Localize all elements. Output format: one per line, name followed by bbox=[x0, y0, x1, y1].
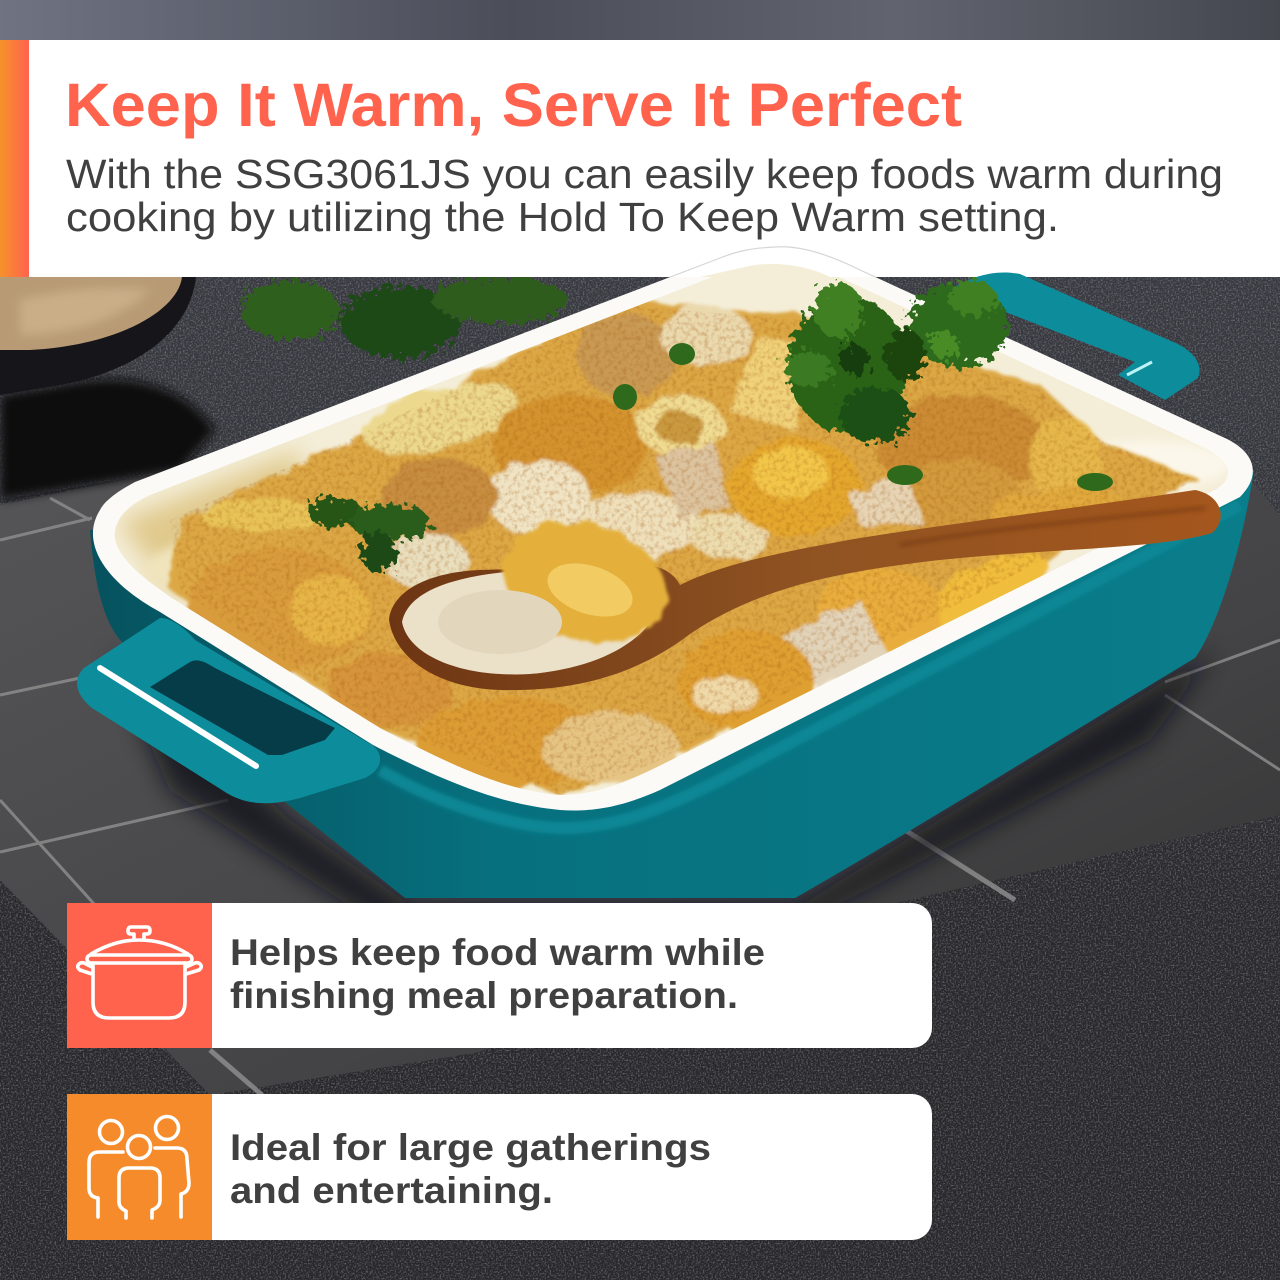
towel bbox=[0, 470, 1280, 1095]
intro text bbox=[66, 151, 1223, 240]
intro text: With the SSG3061JS you can easily keep foods warm during bbox=[66, 151, 1223, 197]
dish shadow bbox=[110, 650, 1215, 925]
parsley in background bbox=[240, 276, 568, 358]
card text: finishing meal preparation. bbox=[230, 975, 738, 1016]
card text bbox=[230, 932, 765, 1016]
card text: Helps keep food warm while bbox=[230, 932, 765, 973]
food bbox=[166, 299, 1202, 795]
title: Keep It Warm, Serve It Perfect bbox=[65, 71, 962, 139]
card text: Ideal for large gatherings bbox=[230, 1127, 711, 1168]
icon tile bbox=[67, 1094, 212, 1240]
gradient accent bar bbox=[0, 40, 29, 277]
icon: family bbox=[89, 1116, 189, 1218]
card text: and entertaining. bbox=[230, 1170, 553, 1211]
header panel bbox=[0, 40, 1280, 277]
parsley garnish left bbox=[307, 497, 430, 572]
card: keep food warm bbox=[67, 903, 932, 1048]
dish teal body bbox=[90, 470, 1254, 898]
back handle bbox=[935, 272, 1200, 400]
bowl with breadcrumbs bbox=[0, 277, 215, 500]
dish white rim bbox=[93, 247, 1253, 810]
dish inner wall bbox=[114, 277, 1228, 795]
parsley specks bbox=[613, 343, 1113, 491]
wooden spoon bbox=[389, 490, 1221, 690]
dish back rim and handle over header bbox=[669, 246, 1027, 277]
card text bbox=[230, 1127, 711, 1211]
teal rim shine bbox=[380, 505, 1240, 828]
card: large gatherings bbox=[67, 1094, 932, 1240]
parsley garnish top right bbox=[784, 280, 1008, 443]
front handle bbox=[77, 618, 380, 803]
icon: cooking pot bbox=[78, 927, 201, 1018]
intro text: cooking by utilizing the Hold To Keep Warm setting. bbox=[66, 194, 1059, 240]
icon tile bbox=[67, 903, 212, 1048]
